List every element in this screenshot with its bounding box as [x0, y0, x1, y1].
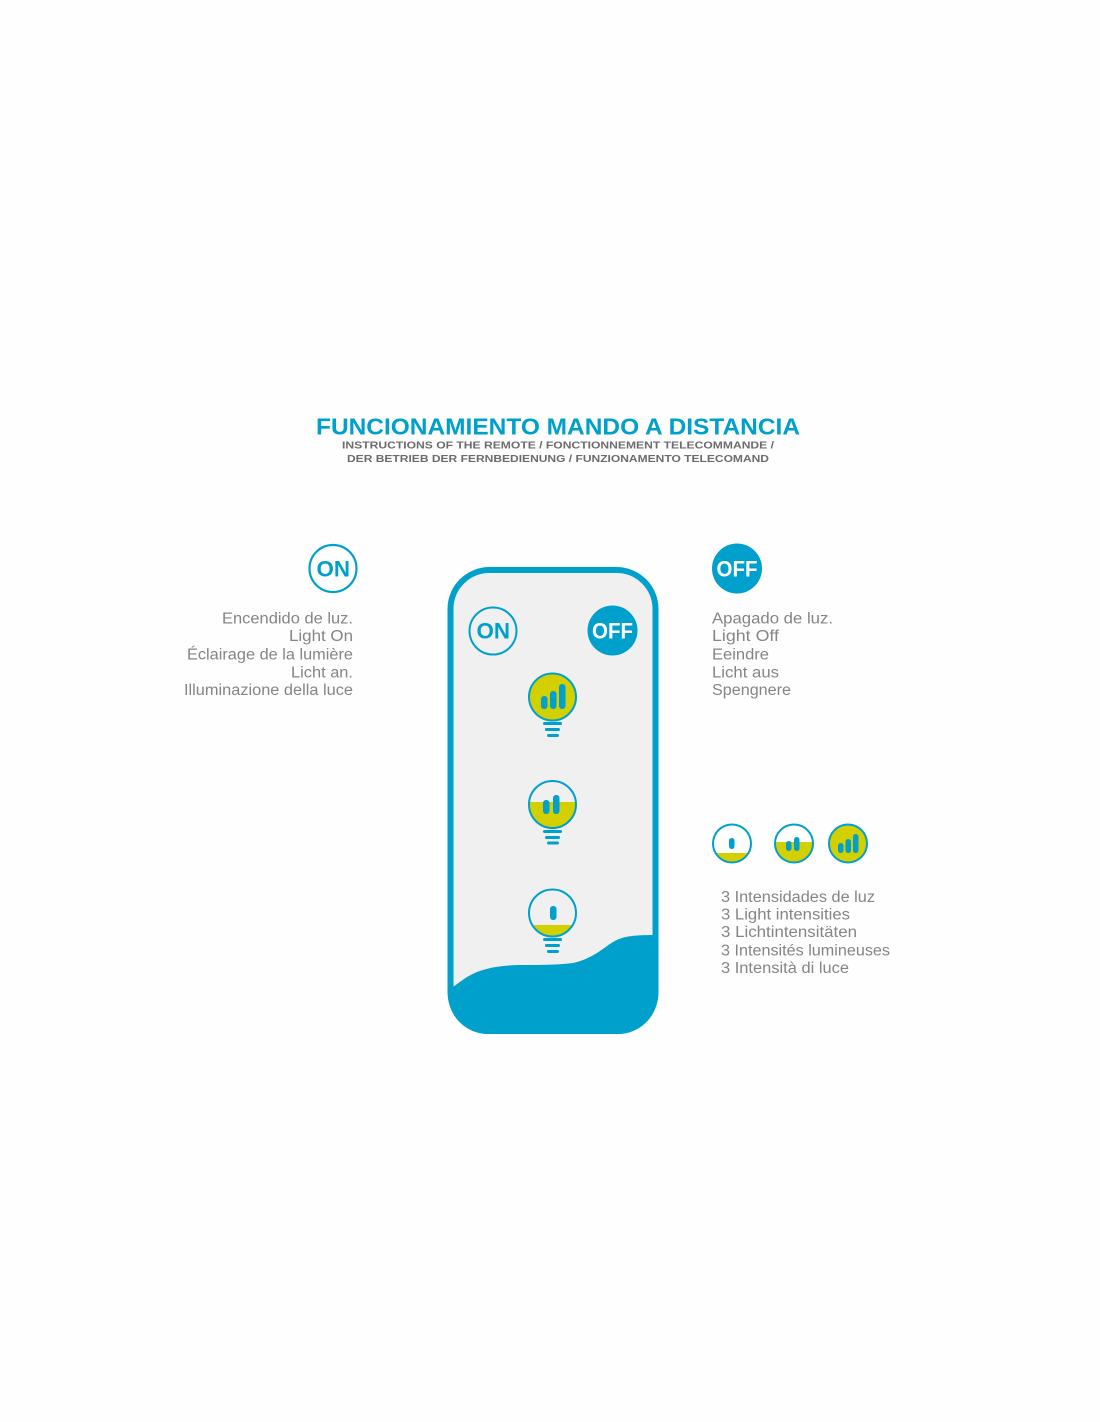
- text block: light off: Apagado de luz.: [712, 610, 833, 628]
- remote OFF button: OFF: [592, 618, 633, 644]
- remote ON button: [470, 608, 516, 654]
- text block: light intensities: 3 Intensità di luce: [721, 960, 849, 977]
- text block: light on: [184, 610, 353, 699]
- text block: light intensities: 3 Intensités lumineuses: [721, 942, 890, 960]
- subtitle: DER BETRIEB DER FERNBEDIENUNG / FUNZIONAMENTO TELECOMAND: [347, 453, 769, 465]
- remote ON button: ON: [476, 618, 510, 644]
- icon: bulb low intensity: [529, 890, 576, 953]
- icon: legend high intensity: [829, 824, 867, 862]
- title: FUNCIONAMIENTO MANDO A DISTANCIA: [316, 414, 800, 440]
- icon: bulb medium intensity: [529, 781, 576, 844]
- subtitle: [342, 440, 774, 465]
- text block: light off: Spengnere: [712, 682, 791, 699]
- icon: ON button legend: [310, 545, 356, 592]
- text block: light off: Licht aus: [712, 664, 779, 682]
- icon: bulb high intensity: [529, 674, 576, 737]
- subtitle: INSTRUCTIONS OF THE REMOTE / FONCTIONNEMENT TELECOMMANDE /: [342, 440, 774, 452]
- text block: light on: Éclairage de la lumière: [187, 646, 353, 664]
- icon: ON button legend: ON: [316, 556, 350, 582]
- remote wave base: [448, 935, 658, 1034]
- icon: legend medium intensity: [775, 824, 813, 862]
- text block: light intensities: 3 Lichtintensitäten: [721, 924, 857, 941]
- panel: remote control: [448, 570, 658, 1034]
- remote body: [450, 570, 656, 1031]
- text block: light off: Eeindre: [712, 646, 769, 664]
- remote OFF button: [588, 606, 638, 656]
- icon: legend low intensity: [713, 824, 751, 862]
- text block: light intensities: 3 Light intensities: [721, 906, 850, 924]
- text block: light on: Licht an.: [291, 664, 353, 682]
- icon: OFF button legend: [712, 544, 762, 594]
- text block: light off: Light Off: [712, 628, 780, 645]
- text block: light on: Light On: [289, 628, 353, 645]
- text block: light intensities: [721, 889, 890, 977]
- text block: light off: [712, 610, 833, 699]
- text block: light on: Illuminazione della luce: [184, 682, 353, 699]
- text block: light on: Encendido de luz.: [222, 610, 353, 628]
- icon: OFF button legend: OFF: [716, 556, 758, 582]
- text block: light intensities: 3 Intensidades de luz: [721, 889, 875, 906]
